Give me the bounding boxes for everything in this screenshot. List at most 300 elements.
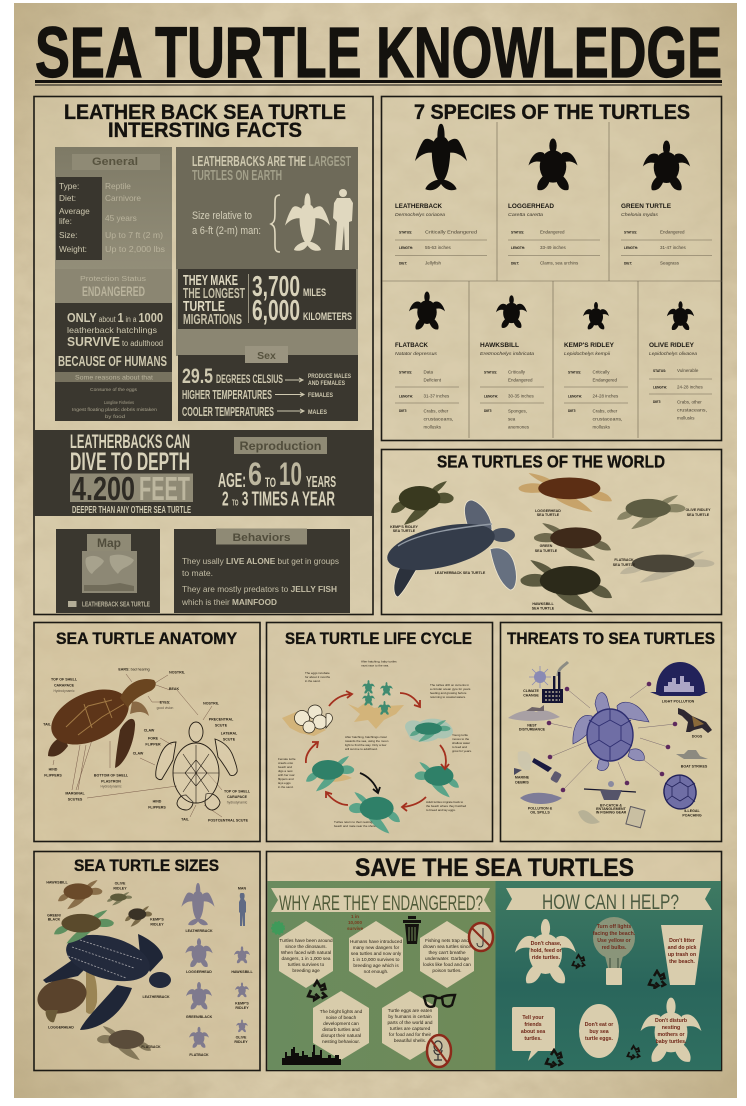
migration block: KILOMETERS	[303, 311, 352, 323]
turtle: green: BLACK	[48, 918, 61, 922]
help: turtle 2: baby turtles.	[656, 1039, 687, 1045]
life cycle captions: flippers and	[278, 777, 294, 781]
life cycle captions: Young turtle	[452, 733, 468, 737]
life cycle captions: returning to coastal waters.	[430, 695, 466, 699]
species: green turtle: 31-47 inches	[660, 245, 687, 250]
protection status block: by food	[105, 414, 126, 419]
turtle: loggerhead: LOGGERHEAD	[48, 1026, 74, 1030]
turtle: kemp's ridley: SEA TURTLE	[393, 529, 416, 533]
threat connectors	[549, 684, 675, 790]
life cycle captions: in the sand.	[305, 679, 321, 683]
ribbon: how can i help: HOW CAN I HELP?	[542, 891, 679, 914]
turtle: olive ridley	[107, 882, 132, 905]
help: turtle 2: mothers or	[657, 1032, 685, 1038]
life cycle captions: lays eggs	[278, 781, 291, 785]
species: olive ridley: Crabs, other	[677, 400, 702, 404]
help: turtle 1: ride turtles.	[532, 955, 561, 961]
protection status block: BECAUSE OF HUMANS	[58, 353, 167, 370]
hexagon 4	[313, 991, 369, 1060]
heading: anatomy: SEA TURTLE ANATOMY	[56, 629, 238, 648]
species: kemp's ridley: mollusks	[592, 424, 611, 430]
threat: illegal poaching	[660, 771, 702, 818]
species: hawksbill: DIET:	[484, 409, 492, 413]
anatomy labels: TOP OF SHELL	[224, 790, 251, 794]
turtle: loggerhead	[33, 970, 97, 1030]
icon: recycle 5	[628, 1046, 640, 1059]
turtle: olive ridley: RIDLEY	[113, 886, 127, 890]
life cycle captions: must race to the sea.	[361, 664, 389, 668]
panel: sizes	[33, 852, 260, 1070]
anatomy labels: PRECENTRAL	[209, 718, 234, 722]
icon: recycle 2	[572, 955, 584, 968]
threat: light pollution	[650, 662, 708, 704]
anatomy labels: TAIL	[43, 722, 52, 726]
threat: dogs: DOGS	[692, 734, 703, 738]
life cycle captions: light to find the way. Only a few	[345, 743, 387, 747]
life cycle captions: After hatching, hatchlings crawl	[345, 735, 387, 739]
life cycle captions: grow for years.	[452, 749, 472, 753]
cycle arrows	[306, 691, 449, 811]
icon: leatherback size	[285, 193, 330, 251]
migration block: MIGRATIONS	[183, 311, 242, 328]
help: light bulb: Turn off lights	[597, 924, 631, 930]
turtle: hawksbill: SEA TURTLE	[532, 606, 555, 610]
size labels: LEATHERBACK	[185, 929, 213, 933]
icon: city skyline	[282, 1045, 341, 1065]
help: turtle 1: Don't chase,	[531, 941, 562, 947]
anatomy labels: FLIPPER	[145, 742, 161, 746]
threat: nest disturbance	[508, 705, 560, 732]
anatomy labels: EARS: bad hearing	[118, 668, 150, 672]
panel: save the sea turtles	[266, 852, 722, 1070]
panel: threats	[500, 622, 722, 842]
species: olive ridley: STATUS:	[653, 369, 666, 373]
threat: by-catch	[578, 781, 645, 828]
life cycle captions: moves to the	[452, 737, 470, 741]
species: flatback: Data	[424, 370, 434, 374]
dive and reproduction band: LEATHERBACKS CAN	[70, 432, 190, 453]
anatomy labels: FLIPPERS	[148, 806, 166, 810]
threat: by-catch: ENTANGLEMENT	[596, 807, 627, 811]
size labels: FLATBACK	[189, 1053, 209, 1057]
general block: Diet:	[59, 193, 76, 203]
species: green turtle	[621, 140, 712, 266]
dive and reproduction band: YEARS	[306, 474, 336, 491]
heading: species: 7 SPECIES OF THE TURTLES	[414, 101, 690, 124]
anatomy labels: SCUTE	[223, 738, 236, 742]
anatomy labels: EYES:	[160, 700, 170, 704]
dive and reproduction band: DIVE TO DEPTH	[70, 448, 190, 476]
species: flatback: Deficient	[424, 378, 442, 382]
life cycle captions	[278, 660, 472, 828]
hexagon 5: beautiful shells.	[394, 1038, 426, 1043]
species: hawksbill: Endangered	[508, 378, 533, 382]
general block: Size:	[59, 230, 77, 240]
threat: boat strikes: BOAT STRIKES	[681, 764, 708, 768]
green left panel	[268, 881, 496, 1070]
threat: pollution oil	[520, 793, 562, 814]
help: egg: Don't eat or	[585, 1022, 613, 1028]
help: turtle 2	[641, 998, 701, 1062]
sex block: FEMALES	[308, 392, 334, 399]
hexagon 5	[382, 991, 438, 1060]
hexagon 2: Humans have introduced	[350, 939, 402, 944]
anatomy labels: SCUTE	[215, 724, 228, 728]
migration block	[176, 269, 358, 356]
life cycle captions: Turtles return to their nesting	[334, 820, 373, 824]
species: olive ridley: LENGTH:	[653, 386, 667, 390]
size labels: MAN	[238, 886, 246, 890]
turtle: kemp's ridley	[390, 481, 454, 533]
life cycle captions: beach and mate near the shore.	[334, 824, 377, 828]
anatomy labels: TOP OF SHELL	[51, 678, 78, 682]
species: olive ridley: mollusks	[677, 416, 695, 420]
threat: climate change: CLIMATE	[523, 689, 539, 693]
species: hawksbill	[480, 295, 544, 430]
size labels: RIDLEY	[234, 1040, 248, 1044]
sand splash eggs	[282, 712, 326, 736]
help: egg	[579, 1004, 619, 1058]
size labels: KEMP'S	[235, 1002, 249, 1006]
life cycle captions: feeding and growing before	[430, 691, 467, 695]
hexagon 4: nesting behaviour.	[322, 1039, 360, 1044]
connector dots	[547, 682, 677, 792]
hexagon 4: development can	[323, 1021, 359, 1026]
turtle: loggerhead: SEA TURTLE	[537, 513, 560, 517]
species: green turtle: Chelonia mydas	[621, 212, 659, 217]
species: olive ridley: OLIVE RIDLEY	[649, 342, 695, 349]
sex block: PRODUCE MALES	[308, 374, 351, 380]
help: cup	[661, 925, 703, 985]
species dividers	[382, 122, 722, 438]
hexagon 1: Turtles have been around	[279, 938, 333, 943]
general block: Up to 7 ft (2 m)	[105, 230, 163, 240]
hexagon 4: disrupt their natural	[321, 1033, 361, 1038]
protection status block: ONLY about 1 in a 1000	[67, 310, 163, 325]
help: speech bubble: friends	[524, 1022, 542, 1028]
anatomy labels: POSTCENTRAL SCUTE	[208, 818, 249, 822]
species: kemp's ridley: Lepidochelys kempii	[564, 351, 611, 356]
species: hawksbill: Eretmochelys imbricata	[480, 351, 535, 356]
hexagon 5: turtles are captured	[390, 1026, 431, 1031]
threat: nest disturbance: DISTURBANCE	[519, 728, 546, 732]
dive and reproduction band	[34, 430, 373, 516]
sex block: MALES	[308, 409, 328, 416]
map block: LEATHERBACK SEA TURTLE	[82, 602, 150, 608]
size labels: LOGGERHEAD	[186, 970, 212, 974]
turtle: olive ridley: SEA TURTLE	[687, 513, 710, 517]
icon: recycle 4	[546, 1050, 562, 1067]
help: speech bubble: turtles.	[524, 1036, 542, 1042]
anatomy labels: SCUTES	[68, 798, 83, 802]
general block	[55, 147, 172, 270]
help: light bulb: red bulbs.	[602, 945, 627, 951]
general block: Carnivore	[105, 193, 141, 203]
general block: Average	[59, 206, 90, 216]
turtle: leatherback	[383, 500, 516, 597]
turtle: green: SEA TURTLE	[535, 549, 558, 553]
threat: dogs	[678, 708, 712, 738]
anatomy labels: TAIL	[181, 818, 190, 822]
eggs	[294, 705, 332, 733]
hexagon 2	[349, 921, 403, 988]
sex block: 29.5	[182, 365, 213, 388]
life cycle captions: towards the sea, using the moon	[345, 739, 389, 743]
turtle: hawksbill	[521, 560, 612, 612]
threat: marine debris: MARINE	[515, 776, 530, 780]
protection status block: Ingest floating plastic debris mistaken	[72, 407, 158, 412]
species: loggerhead: LOGGERHEAD	[508, 203, 554, 210]
map block	[56, 529, 160, 613]
threat: pollution oil: OIL SPILLS	[530, 810, 550, 814]
species: flatback: DIET:	[399, 409, 407, 413]
ribbon: why endangered: WHY ARE THEY ENDANGERED?	[279, 892, 483, 915]
dive and reproduction band: 10	[279, 456, 302, 492]
general block: 45 years	[105, 213, 137, 223]
species: loggerhead: Clams, sea urchins	[540, 260, 579, 266]
hexagon 1: since the dinosaurs.	[285, 944, 327, 949]
hexagon 2: not enough.	[364, 969, 388, 974]
size labels: GREEN/BLACK	[186, 1015, 213, 1019]
species: flatback: LENGTH:	[399, 394, 413, 398]
general block: Type:	[59, 181, 79, 191]
threat: marine debris: DEBRIS	[515, 780, 529, 784]
icon: glasses	[424, 995, 455, 1007]
behaviors block: which is their MAINFOOD	[181, 597, 277, 607]
threat: marine debris	[514, 751, 562, 784]
callout: 1 in 10,000: survive	[347, 926, 363, 931]
migration block: TURTLE	[183, 298, 225, 315]
anatomy labels: NOSTRIL	[203, 702, 220, 706]
species: green turtle: DIET:	[624, 262, 632, 266]
hexagon 1	[279, 921, 333, 988]
largest turtles block: a 6-ft (2-m) man:	[192, 225, 261, 237]
icon: man	[239, 893, 246, 926]
life cycle captions: Adult turtles migrate back to	[426, 800, 464, 804]
species: leatherback: LEATHERBACK	[395, 203, 442, 210]
help: cup: Don't litter	[669, 938, 695, 944]
help: turtle 2: nesting	[662, 1025, 680, 1031]
turtle: hawksbill: HAWKSBILL	[532, 602, 554, 606]
species: loggerhead: LENGTH:	[511, 246, 525, 250]
behaviors block: to mate.	[182, 568, 213, 578]
anatomy labels: FORE	[148, 736, 159, 740]
protection status block: leatherback hatchlings	[67, 325, 157, 335]
species: olive ridley: Vulnerable	[677, 368, 699, 373]
central turtle	[573, 693, 649, 771]
icon: no egg	[427, 1035, 451, 1067]
dive and reproduction band: AGE:	[218, 470, 246, 492]
dive and reproduction band: 4.200	[72, 470, 135, 507]
heading: life cycle: SEA TURTLE LIFE CYCLE	[285, 629, 472, 648]
hexagon 3: drown sea turtles since	[423, 944, 471, 949]
heading: save: SAVE THE SEA TURTLES	[355, 854, 634, 882]
anatomy labels: HIND	[49, 768, 58, 772]
species: green turtle: GREEN TURTLE	[621, 203, 672, 210]
protection status block: Protection Status	[80, 274, 146, 283]
turtle: flatback	[613, 551, 714, 583]
species: kemp's ridley: KEMP'S RIDLEY	[564, 342, 615, 349]
migration block: MILES	[303, 287, 326, 299]
icon: recycle 3	[649, 971, 665, 988]
species: leatherback: Jellyfish	[425, 260, 442, 266]
panel: leatherback facts	[34, 96, 373, 614]
largest turtles block	[176, 147, 358, 270]
behaviors block	[174, 528, 350, 613]
hexagon 3: poison turtles.	[432, 968, 462, 973]
general block: Weight:	[59, 244, 87, 254]
anatomy labels: LATERAL	[221, 732, 238, 736]
life cycle captions: The turtles drift on currents in	[430, 683, 469, 687]
hexagon 2: 1 in 10,000 survives to	[353, 957, 400, 962]
migration block: 3,700	[252, 271, 300, 303]
species: flatback: Natator depressus	[395, 351, 438, 356]
life cycle captions: After hatching, baby turtles	[361, 660, 397, 664]
life cycle captions: to breed and lay eggs.	[426, 808, 456, 812]
species: kemp's ridley: Critically	[592, 370, 610, 374]
threat: illegal poaching: POACHING	[682, 814, 702, 818]
life cycle captions: the beach where they hatched	[426, 804, 467, 808]
anatomy labels: HIND	[153, 800, 162, 804]
turtle: flatback: FLATBACK	[614, 558, 634, 562]
general block: Up to 2,000 lbs	[105, 244, 165, 254]
species: green turtle: STATUS:	[624, 230, 637, 234]
size labels: HAWKSBILL	[231, 970, 253, 974]
turtle: leatherback: LEATHERBACK	[142, 995, 170, 999]
species: loggerhead: 33-49 inches	[540, 245, 567, 250]
hatchlings	[362, 680, 393, 715]
help: turtle 1	[515, 919, 576, 983]
hexagon 1: turtles survives to	[288, 962, 325, 967]
turtle: kemp's ridley	[125, 906, 164, 927]
dive and reproduction band: DEEPER THAN ANY OTHER SEA TURTLE	[72, 505, 191, 516]
sex block: HIGHER TEMPERATURES	[182, 387, 272, 402]
turtle: green	[47, 910, 114, 944]
size labels: RIDLEY	[235, 1006, 249, 1010]
help: speech bubble: Tell your	[522, 1015, 544, 1021]
help: egg: buy sea	[589, 1029, 609, 1035]
species: olive ridley: crustaceans,	[677, 408, 707, 412]
hexagon 3: underwater. Garbage	[425, 956, 469, 961]
species: flatback: 31-37 inches	[424, 394, 450, 398]
protection status block: Some reasons about that	[75, 374, 153, 382]
life cycle captions: a circular ocean gyre for years	[430, 687, 471, 691]
species: kemp's ridley: DIET:	[568, 409, 576, 413]
turtle: loggerhead: LOGGERHEAD	[535, 509, 561, 513]
threat: nest disturbance: NEST	[527, 724, 538, 728]
life cycle captions: with her rear	[278, 773, 295, 777]
icon: green gear	[272, 922, 284, 934]
species: kemp's ridley	[564, 302, 628, 430]
hexagon 1: When faced with natural	[281, 950, 331, 955]
anatomy labels: BEAK	[169, 687, 179, 691]
protection status block	[55, 269, 172, 421]
protection status block: SURVIVE to adulthood	[67, 334, 163, 349]
species: leatherback: DIET:	[399, 262, 407, 266]
anatomy labels: good vision	[157, 706, 174, 710]
turtle: leatherback: LEATHERBACK SEA TURTLE	[435, 571, 486, 575]
help: light bulb	[593, 917, 636, 985]
hexagon 1: dangers, 1 in 1,000 sea	[282, 956, 331, 961]
species: kemp's ridley: STATUS:	[568, 370, 581, 374]
general block: life:	[59, 216, 72, 226]
species: kemp's ridley: LENGTH:	[568, 394, 582, 398]
species: leatherback: Dermochelys coriacea	[395, 212, 446, 217]
turtle: flatback: FLATBACK	[141, 1045, 161, 1049]
protection status block: ENDANGERED	[82, 283, 145, 299]
water cloud	[405, 719, 453, 742]
species: loggerhead: Caretta caretta	[508, 212, 544, 217]
species: green turtle: LENGTH:	[624, 246, 638, 250]
hexagon 1: breeding age	[292, 968, 320, 973]
turtle: hawksbill: HAWKSBILL	[46, 880, 68, 884]
species: leatherback: Critically Endangered	[425, 230, 478, 234]
map block: Map	[97, 536, 121, 550]
anatomy pointer lines	[52, 674, 222, 817]
map image	[82, 551, 137, 593]
species: olive ridley: Lepidochelys olivacea	[649, 351, 698, 356]
species: green turtle: Seagrass	[660, 260, 680, 266]
sex block	[178, 346, 358, 421]
size labels: OLIVE	[236, 1036, 247, 1040]
panel: life cycle	[266, 622, 492, 842]
threat: boat strikes	[676, 750, 708, 768]
dive and reproduction band: FEET	[139, 470, 190, 507]
size labels	[185, 886, 253, 1057]
migration block: 6,000	[252, 295, 300, 327]
anatomy labels: PLASTRON	[101, 780, 121, 784]
species: leatherback	[395, 124, 487, 266]
life cycle captions: will survive to adulthood.	[345, 747, 378, 751]
sex block: COOLER TEMPERATURES	[182, 404, 274, 419]
hexagon 5: Turtle eggs are eaten	[388, 1008, 433, 1013]
turtle: kemp's ridley: RIDLEY	[150, 922, 164, 926]
anatomy labels: Hydrodynamic	[53, 689, 75, 693]
species: hawksbill: anemones	[508, 424, 530, 430]
sand splash	[348, 702, 404, 729]
species: leatherback: 55-63 inches	[425, 245, 452, 250]
arrows	[275, 378, 304, 413]
species: green turtle: Endangered	[660, 230, 685, 234]
behaviors block: They usally LIVE ALONE but get in groups	[182, 556, 339, 566]
ribbon: how can i help	[506, 888, 712, 914]
threat: light pollution: LIGHT POLLUTION	[662, 700, 695, 704]
general block: Reptile	[105, 181, 131, 191]
anatomy labels: hydrodynamic	[227, 800, 248, 804]
icon: recycle left	[308, 981, 326, 1000]
species: hawksbill: 30-35 inches	[508, 394, 535, 398]
species: flatback: STATUS:	[399, 370, 412, 374]
largest turtles block: LEATHERBACKS ARE THE LARGEST	[192, 153, 351, 170]
panel: 7 species	[382, 96, 722, 440]
species: hawksbill: STATUS:	[484, 370, 497, 374]
hexagon 4: The bright lights and	[320, 1009, 363, 1014]
hexagon 5: parts of the world and	[387, 1020, 433, 1025]
anatomy labels: Hydrodynamic	[100, 784, 122, 788]
life cycle captions: crawls onto	[278, 761, 294, 765]
hexagon 2: breeding age which is	[353, 963, 399, 968]
green right panel	[496, 881, 721, 1070]
species: flatback	[395, 292, 459, 430]
anatomy labels	[43, 668, 251, 822]
species: kemp's ridley: 24-28 inches	[592, 394, 619, 398]
heading: leatherback: LEATHER BACK SEA TURTLE	[64, 101, 346, 124]
turtle: green: GREEN/	[47, 914, 61, 918]
help: light bulb: facing the beach.	[593, 931, 636, 937]
species: flatback: mollusks	[424, 424, 442, 430]
sex block: DEGREES CELSIUS	[216, 372, 283, 386]
turtle: green: GREEN	[540, 544, 553, 548]
